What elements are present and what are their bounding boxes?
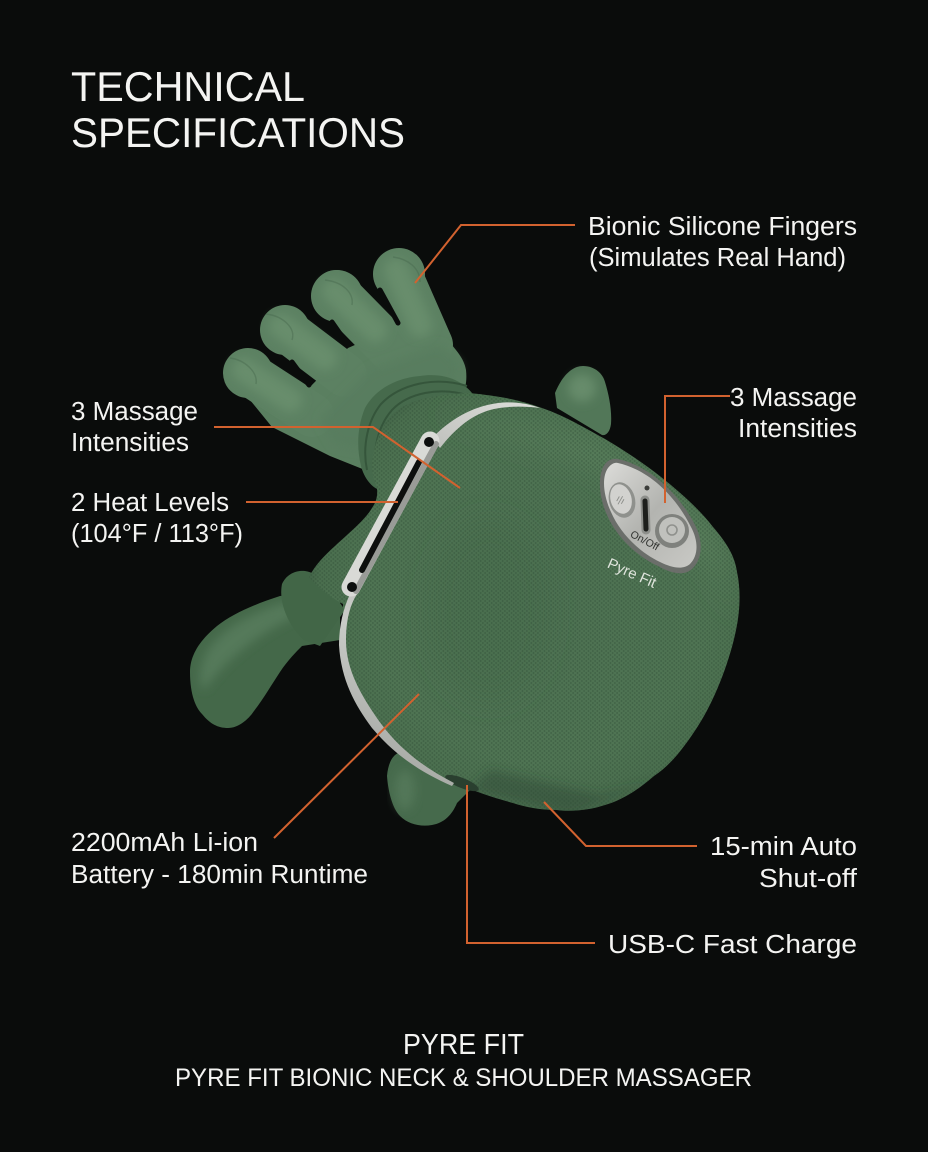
lower blob finger xyxy=(387,753,470,826)
callout: massage intensities left: 3 Massage xyxy=(71,398,198,426)
footer: brand and product name: PYRE FIT xyxy=(403,1029,524,1061)
palm xyxy=(250,318,466,470)
power button xyxy=(655,514,689,548)
callout: bionic fingers xyxy=(588,213,857,272)
silver side bar with slot xyxy=(347,437,436,592)
USB-C port xyxy=(443,772,481,794)
Pyre Fit logo: Pyre Fit xyxy=(605,555,660,592)
bulbous finger tips xyxy=(223,248,425,398)
callout: battery: 2200mAh Li-ion xyxy=(71,829,258,857)
footer: brand and product name xyxy=(175,1029,752,1092)
product: bionic neck massager xyxy=(190,248,750,826)
left arm xyxy=(190,571,345,728)
callout: bionic fingers: Bionic Silicone Fingers xyxy=(588,213,857,241)
On/Off label: On/Off xyxy=(628,528,661,553)
callout: battery xyxy=(71,829,368,889)
infographic canvas xyxy=(72,72,857,1086)
intensity button: ı|ı xyxy=(614,493,627,507)
mesh fabric body xyxy=(300,380,750,820)
callout: auto shut-off xyxy=(710,833,858,893)
callout: heat levels: 2 Heat Levels xyxy=(71,489,229,517)
callout: massage intensities left xyxy=(71,398,198,457)
callout: USB-C: USB-C Fast Charge xyxy=(608,931,857,959)
arm collar xyxy=(281,571,345,646)
finger highlights xyxy=(244,270,420,400)
right small finger xyxy=(555,366,611,435)
wrist collar rings xyxy=(358,375,480,490)
callout: heat levels: (104°F / 113°F) xyxy=(71,520,243,548)
callout: auto shut-off: Shut-off xyxy=(759,865,858,893)
title: TECHNICAL xyxy=(71,63,305,110)
callout: massage intensities left: Intensities xyxy=(71,429,189,457)
USB slot xyxy=(645,500,646,530)
footer: brand and product name: PYRE FIT BIONIC NECK & SHOULDER MASSAGER xyxy=(175,1064,752,1092)
finger nails xyxy=(230,257,420,384)
dark finger gaps xyxy=(292,290,398,385)
title xyxy=(71,63,405,156)
callout: auto shut-off: 15-min Auto xyxy=(710,833,857,861)
callout: battery: Battery - 180min Runtime xyxy=(71,861,368,889)
callout: massage intensities right: Intensities xyxy=(738,415,857,443)
palm highlight xyxy=(320,345,460,450)
title: SPECIFICATIONS xyxy=(71,109,405,156)
callout: heat levels xyxy=(71,489,243,548)
callout: massage intensities right: 3 Massage xyxy=(730,384,857,412)
hand with silicone fingers xyxy=(223,248,466,470)
silver band xyxy=(339,402,540,786)
callout: massage intensities right xyxy=(730,384,857,443)
leader lines xyxy=(214,225,730,943)
control panel xyxy=(600,459,701,573)
callout: bionic fingers: (Simulates Real Hand) xyxy=(589,244,846,272)
